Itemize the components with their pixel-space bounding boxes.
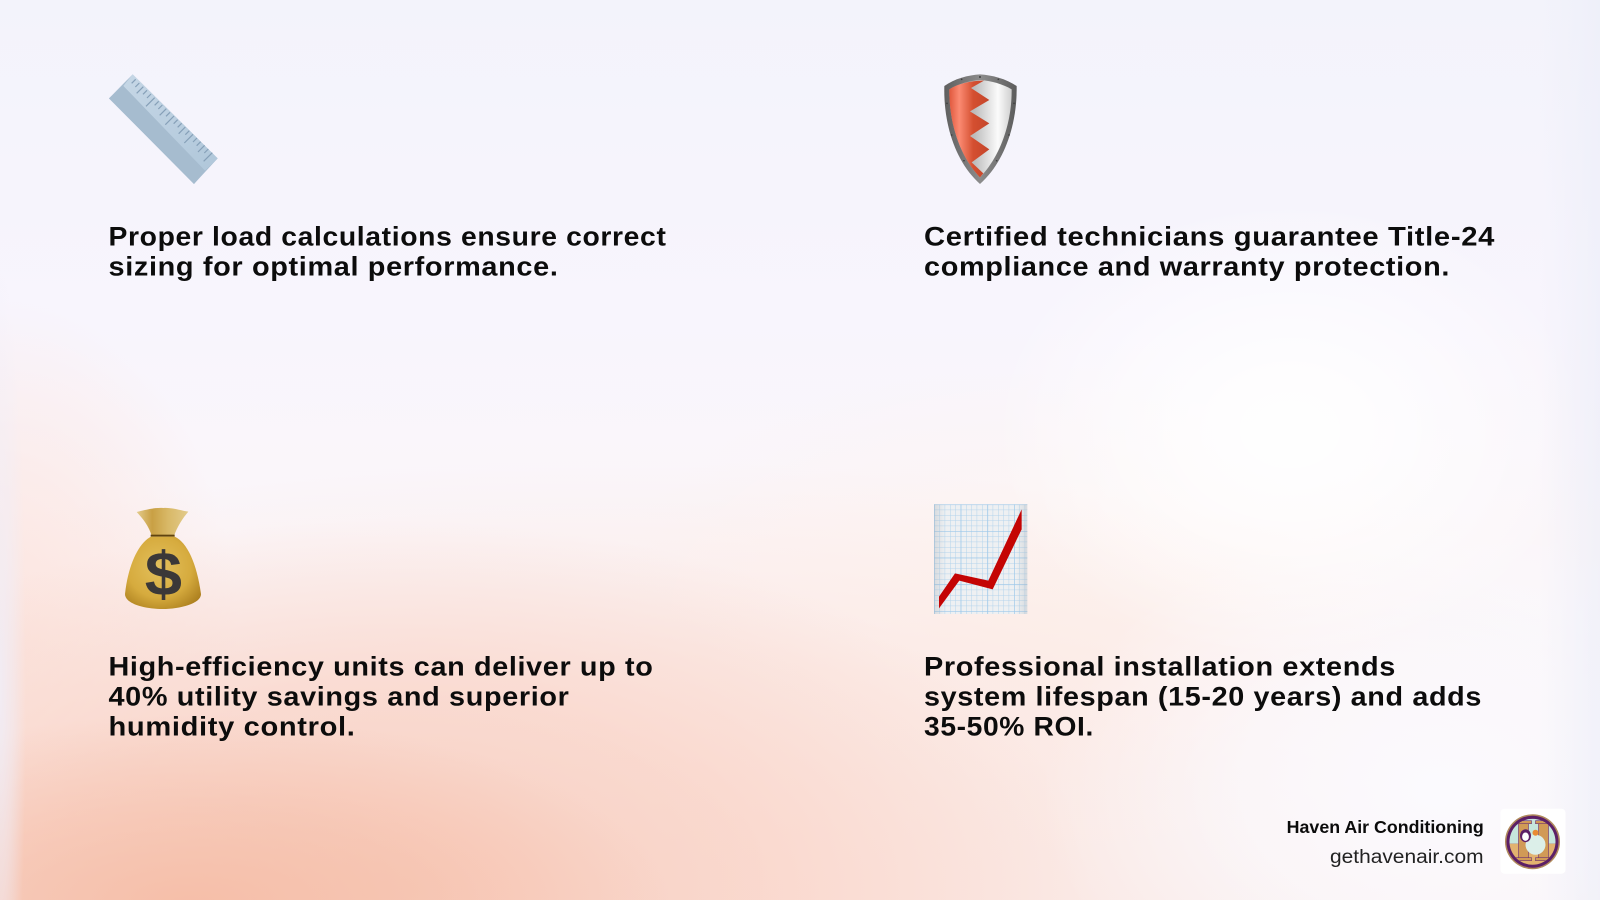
text: professional installation: system lifespan (15-20 years) and adds: [924, 682, 1482, 712]
icon: money bag: $: [145, 540, 182, 609]
text: high-efficiency: [108, 652, 654, 742]
icon: shield: [944, 74, 1017, 184]
icon: ruler: [109, 74, 218, 184]
icon: chart: [934, 504, 1027, 614]
text: certified technicians: [924, 222, 1495, 282]
logo: [1500, 809, 1566, 874]
text: professional installation: Professional installation extends: [924, 652, 1396, 682]
text: certified technicians: compliance and warranty protection.: [924, 252, 1450, 282]
brand name: Haven Air Conditioning: [1287, 817, 1484, 837]
icon: money bag: [125, 508, 201, 609]
text: load calculations: [108, 222, 666, 282]
text: high-efficiency: 40% utility savings and superior: [108, 682, 570, 712]
text: high-efficiency: High-efficiency units can deliver up to: [108, 652, 654, 682]
text: load calculations: Proper load calculations ensure correct: [108, 222, 666, 252]
text: load calculations: sizing for optimal performance.: [108, 252, 558, 282]
text: high-efficiency: humidity control.: [108, 712, 356, 742]
text: professional installation: 35-50% ROI.: [924, 712, 1094, 742]
brand url: gethavenair.com: [1330, 847, 1484, 868]
text: professional installation: [924, 652, 1482, 742]
text: certified technicians: Certified technicians guarantee Title-24: [924, 222, 1495, 252]
